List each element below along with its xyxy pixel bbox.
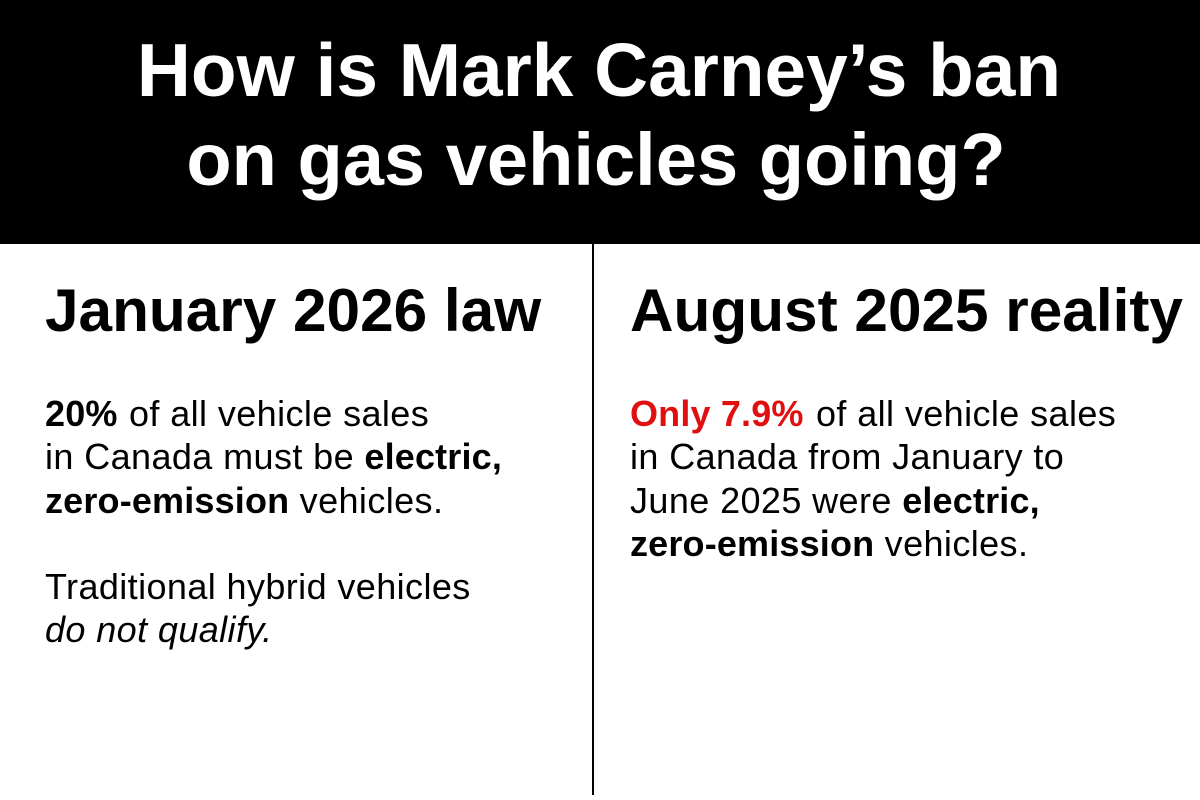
text: only 7.9 percent: June 2025 were electric, (630, 480, 1040, 521)
text: 20 percent requirement: zero-emission vehicles. (45, 480, 443, 521)
heading: August 2025 reality: August 2025 reality (630, 276, 1183, 344)
text: only 7.9 percent (630, 393, 1116, 564)
text: 20 percent requirement: 20% of all vehicle sales (45, 393, 429, 434)
text: only 7.9 percent: Only 7.9% of all vehicle sales (630, 393, 1116, 434)
panel: August 2025 reality (630, 276, 1183, 564)
center divider (592, 244, 594, 795)
text: hybrids do not qualify: do not qualify. (45, 609, 272, 650)
title banner (0, 0, 1200, 244)
text: only 7.9 percent: zero-emission vehicles. (630, 523, 1028, 564)
title line 1: How is Mark Carney’s ban (137, 28, 1061, 112)
text: 20 percent requirement: in Canada must be electric, (45, 436, 502, 477)
text: hybrids do not qualify (45, 566, 471, 650)
heading: January 2026 law: January 2026 law (45, 276, 541, 344)
text: hybrids do not qualify: Traditional hybrid vehicles (45, 566, 471, 607)
title line 2: on gas vehicles going? (186, 118, 1006, 201)
panel: January 2026 law (45, 276, 542, 650)
text: 20 percent requirement (45, 393, 502, 521)
text: only 7.9 percent: in Canada from January to (630, 436, 1064, 477)
